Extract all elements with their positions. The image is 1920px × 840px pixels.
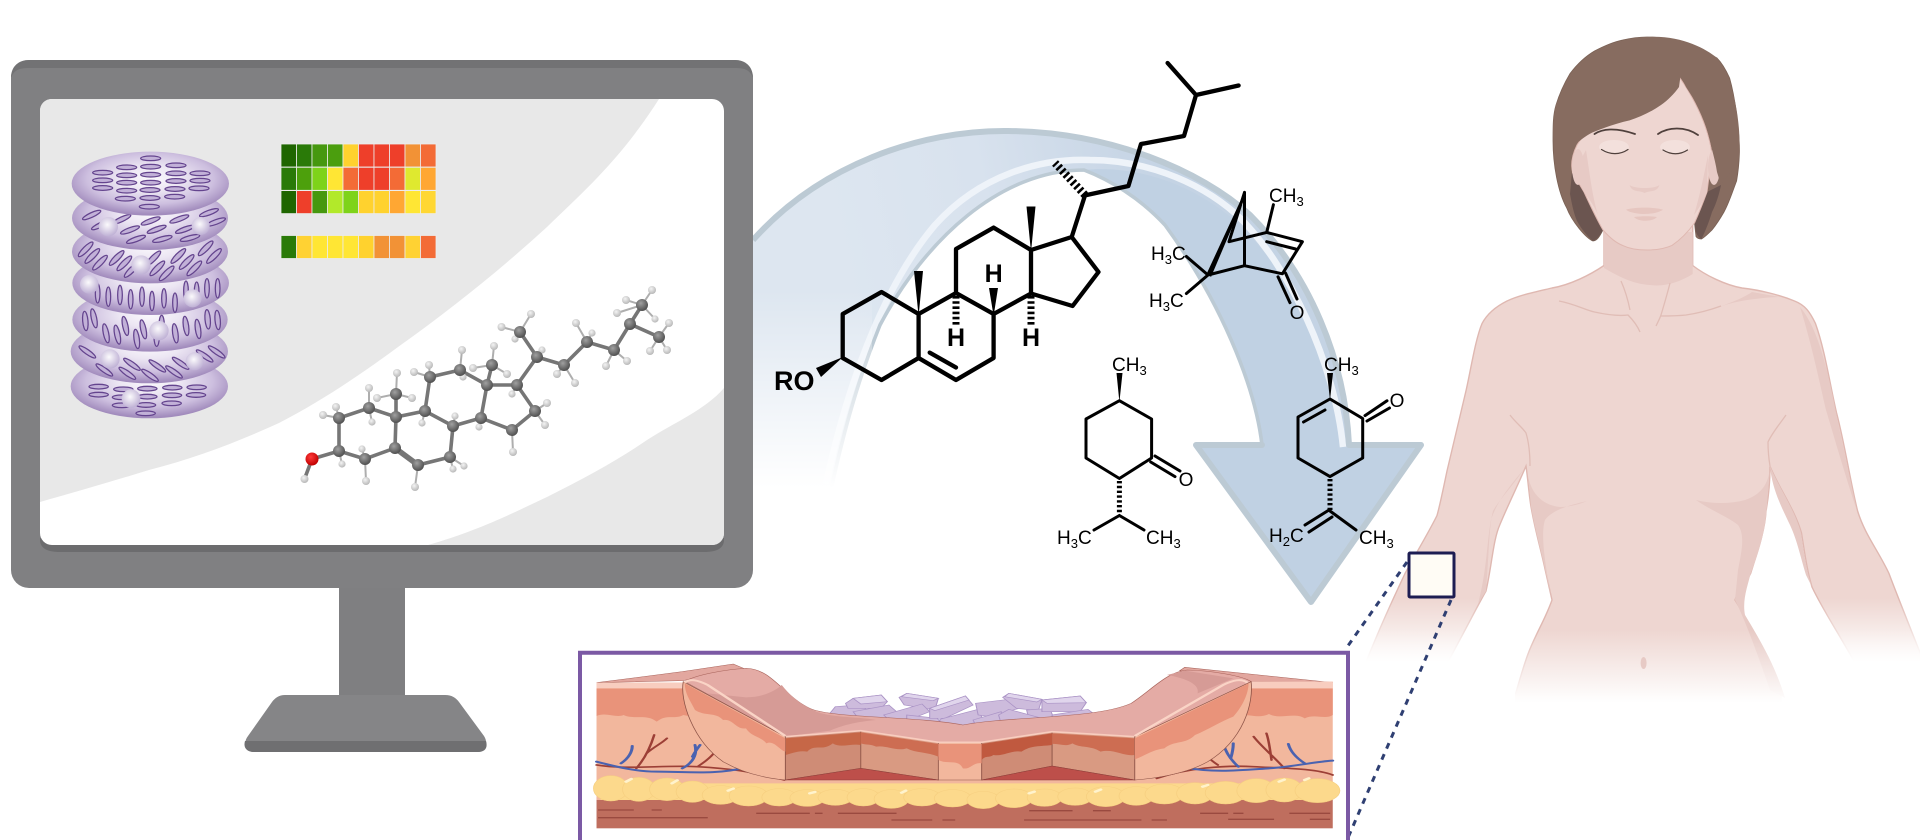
carvone labels: H bbox=[1269, 526, 1283, 547]
verbenone labels: H bbox=[1149, 291, 1163, 312]
hydrogen labels bbox=[947, 260, 1040, 352]
disc 2 bbox=[72, 186, 228, 250]
skeletal formula: cholesterol ester bbox=[774, 63, 1239, 396]
wound panel frame bbox=[580, 653, 1348, 840]
verbenone labels: CH bbox=[1269, 186, 1296, 207]
dotted zoom lines bbox=[1345, 562, 1451, 840]
surface right bbox=[1180, 667, 1333, 683]
carvone labels: CH bbox=[1359, 528, 1386, 549]
menthone labels: O bbox=[1179, 470, 1193, 491]
epidermis left bbox=[597, 688, 691, 722]
disc 3 bbox=[72, 219, 228, 283]
surface left bbox=[597, 664, 746, 683]
dermis layer bbox=[597, 682, 1333, 800]
skeletal formula: carvone bbox=[1269, 355, 1404, 551]
carvone labels: 3 bbox=[1386, 536, 1394, 551]
monitor base bbox=[245, 695, 486, 752]
human figure bbox=[1350, 37, 1920, 712]
hydrogen labels: H bbox=[947, 324, 965, 352]
lipid bilayer stack bbox=[71, 152, 229, 418]
right wound lobe bbox=[1135, 680, 1251, 780]
menthone labels: 3 bbox=[1139, 363, 1147, 378]
hair back bbox=[1553, 37, 1740, 241]
disc 5 bbox=[72, 288, 228, 352]
hydrogen labels: H bbox=[985, 260, 1003, 288]
blood vessels bbox=[597, 733, 1333, 780]
cholesterol ball-and-stick model bbox=[300, 286, 673, 491]
monitor top edge bbox=[11, 60, 753, 78]
epidermis right bbox=[1233, 688, 1333, 718]
menthone labels: CH bbox=[1112, 355, 1139, 376]
verbenone labels: C bbox=[1170, 291, 1184, 312]
carvone labels: 2 bbox=[1283, 534, 1290, 549]
curved arrow bbox=[700, 131, 1421, 602]
wound red base bbox=[785, 766, 1135, 780]
computer monitor bbox=[11, 60, 753, 752]
monitor stand bbox=[339, 586, 405, 697]
eyelids bbox=[1599, 140, 1629, 154]
ears bbox=[1572, 149, 1584, 185]
carvone labels: CH bbox=[1324, 355, 1351, 376]
carvone labels: C bbox=[1290, 526, 1304, 547]
menthone labels: C bbox=[1078, 528, 1092, 549]
screen bbox=[40, 99, 724, 545]
left wound lobe bbox=[683, 680, 785, 780]
fat layer bbox=[593, 776, 1340, 809]
carvone labels: 3 bbox=[1351, 363, 1359, 378]
carvone labels bbox=[1269, 355, 1404, 551]
verbenone labels: H bbox=[1151, 244, 1165, 265]
skeletal formula: menthone bbox=[1057, 355, 1193, 551]
monitor body bbox=[11, 60, 753, 588]
verbenone labels: 3 bbox=[1163, 299, 1170, 314]
screen shadow bbox=[40, 538, 724, 552]
menthone labels: CH bbox=[1146, 528, 1173, 549]
heatmap: single row bbox=[281, 236, 436, 258]
wound cross-section bbox=[593, 664, 1340, 828]
menthone labels: 3 bbox=[1173, 536, 1181, 551]
carvone labels: O bbox=[1390, 391, 1404, 412]
hair shadow bbox=[1570, 167, 1721, 241]
crater surface bbox=[685, 668, 1251, 742]
hydrogen labels: H bbox=[1022, 324, 1040, 352]
arm fade right bbox=[1792, 598, 1920, 708]
skeletal formula: verbenone bbox=[1149, 186, 1304, 324]
heatmap: three rows bbox=[281, 144, 436, 214]
menthone labels bbox=[1057, 355, 1193, 551]
arm fade left bbox=[1350, 598, 1515, 708]
disc 7 bbox=[71, 354, 228, 418]
muscle layer bbox=[597, 797, 1333, 828]
collar bones and creases bbox=[1510, 281, 1786, 466]
nose bbox=[1630, 185, 1659, 193]
lips bbox=[1626, 208, 1663, 221]
crystals bbox=[828, 693, 1096, 726]
menthone labels: 3 bbox=[1071, 536, 1078, 551]
verbenone labels: C bbox=[1172, 244, 1186, 265]
body shading bbox=[1478, 232, 1857, 698]
wound cut faces bbox=[785, 731, 1135, 780]
head bbox=[1572, 78, 1712, 250]
screen upper swoosh bbox=[40, 99, 659, 502]
verbenone labels: 3 bbox=[1296, 194, 1304, 209]
pale strips bbox=[597, 682, 1333, 688]
disc 1 bbox=[72, 152, 229, 216]
navel bbox=[1641, 657, 1647, 669]
menthone labels: H bbox=[1057, 528, 1071, 549]
screen lower swoosh bbox=[428, 388, 724, 545]
skin sample square bbox=[1409, 553, 1454, 597]
RO label: RO bbox=[774, 366, 814, 396]
verbenone labels bbox=[1149, 186, 1304, 324]
hair front bbox=[1553, 37, 1740, 194]
facial features bbox=[1594, 128, 1698, 154]
body bbox=[1355, 225, 1920, 712]
disc 6 bbox=[71, 319, 228, 383]
disc 4 bbox=[72, 251, 229, 315]
verbenone labels: 3 bbox=[1165, 252, 1172, 267]
wound bed epidermis bbox=[785, 731, 1135, 769]
face shading bbox=[1574, 150, 1708, 215]
verbenone labels: O bbox=[1290, 303, 1304, 324]
